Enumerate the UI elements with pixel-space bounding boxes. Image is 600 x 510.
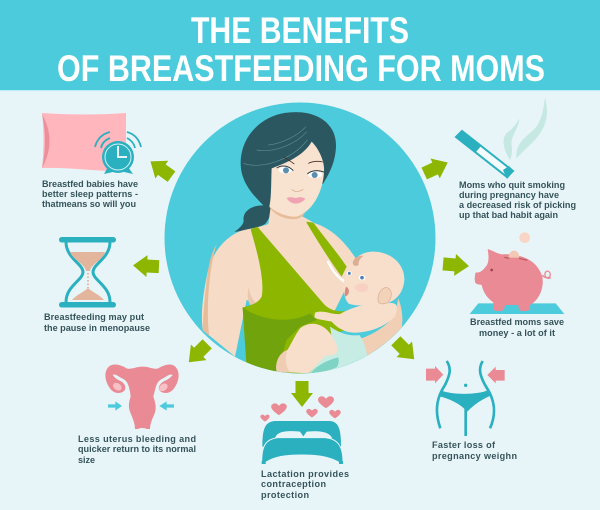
text: menopause: the pause in menopause — [44, 323, 150, 333]
hair strands — [243, 127, 307, 165]
text: uterus: Less uterus bleeding and — [78, 434, 196, 444]
text: menopause: Breastfeeding may put — [44, 312, 144, 322]
text: savings — [470, 317, 564, 338]
panel: sleep — [42, 113, 141, 209]
mother's forearm holding baby — [362, 298, 402, 356]
arrows around the circle — [132, 152, 470, 407]
text: savings: money - a lot of it — [479, 328, 555, 338]
baby's arm and shoulder — [314, 303, 397, 333]
icon: hearts — [260, 396, 341, 422]
text: uterus — [78, 434, 196, 465]
panel: weight loss — [426, 361, 517, 461]
panel: contraception — [260, 396, 349, 500]
text: savings: Breastfed moms save — [470, 317, 564, 327]
text: smoking: Moms who quit smoking — [459, 180, 565, 190]
title: THE BENEFITS — [191, 10, 409, 51]
breast highlight — [327, 260, 345, 283]
baby's leg — [276, 324, 337, 373]
text: sleep: thatmeans so will you — [42, 199, 136, 209]
panel: savings — [470, 232, 564, 338]
eyes and brows — [277, 157, 324, 178]
text: sleep: Breastfed babies have — [42, 179, 138, 189]
panel: menopause — [44, 237, 150, 333]
nose and mouth — [292, 189, 303, 191]
text: uterus: size — [78, 455, 95, 465]
face — [269, 142, 324, 217]
icon: alarm clock — [95, 132, 141, 174]
text: smoking: up that bad habit again — [459, 210, 558, 220]
icon: waist — [426, 361, 505, 436]
text: contraception — [261, 469, 349, 500]
icon: smoke — [504, 97, 547, 160]
central circle: mother breastfeeding baby — [164, 102, 436, 377]
panel: uterus — [78, 365, 196, 465]
text: contraception: contraception — [261, 479, 326, 489]
text: smoking: a decreased risk of picking — [459, 200, 576, 210]
text: uterus: quicker return to its normal — [78, 444, 196, 454]
text: weight loss: pregnancy weighn — [432, 451, 517, 461]
hair — [234, 112, 336, 232]
text: menopause — [44, 312, 150, 333]
green dress — [243, 227, 350, 377]
text: sleep: better sleep patterns - — [42, 189, 138, 199]
icon: piggy bank — [470, 232, 564, 314]
panel: smoking — [455, 97, 576, 220]
baby's head — [344, 252, 404, 305]
diaper — [308, 327, 367, 374]
mother's skin: shoulders, chest, arm — [202, 207, 357, 357]
icon: pillow — [42, 113, 126, 171]
text: weight loss: Faster loss of — [432, 440, 496, 450]
icon: hourglass — [59, 237, 116, 308]
icon: bed — [262, 421, 343, 464]
icon: cigarette — [455, 130, 514, 179]
icon: uterus — [105, 365, 179, 431]
text: smoking: during pregnancy have — [459, 190, 559, 200]
text: smoking — [459, 180, 576, 220]
baby — [276, 252, 404, 374]
text: sleep — [42, 179, 138, 209]
text: contraception: protection — [261, 490, 309, 500]
text: weight loss — [432, 440, 517, 461]
title — [57, 10, 545, 89]
header banner — [0, 0, 600, 91]
text: contraception: Lactation provides — [261, 469, 349, 479]
